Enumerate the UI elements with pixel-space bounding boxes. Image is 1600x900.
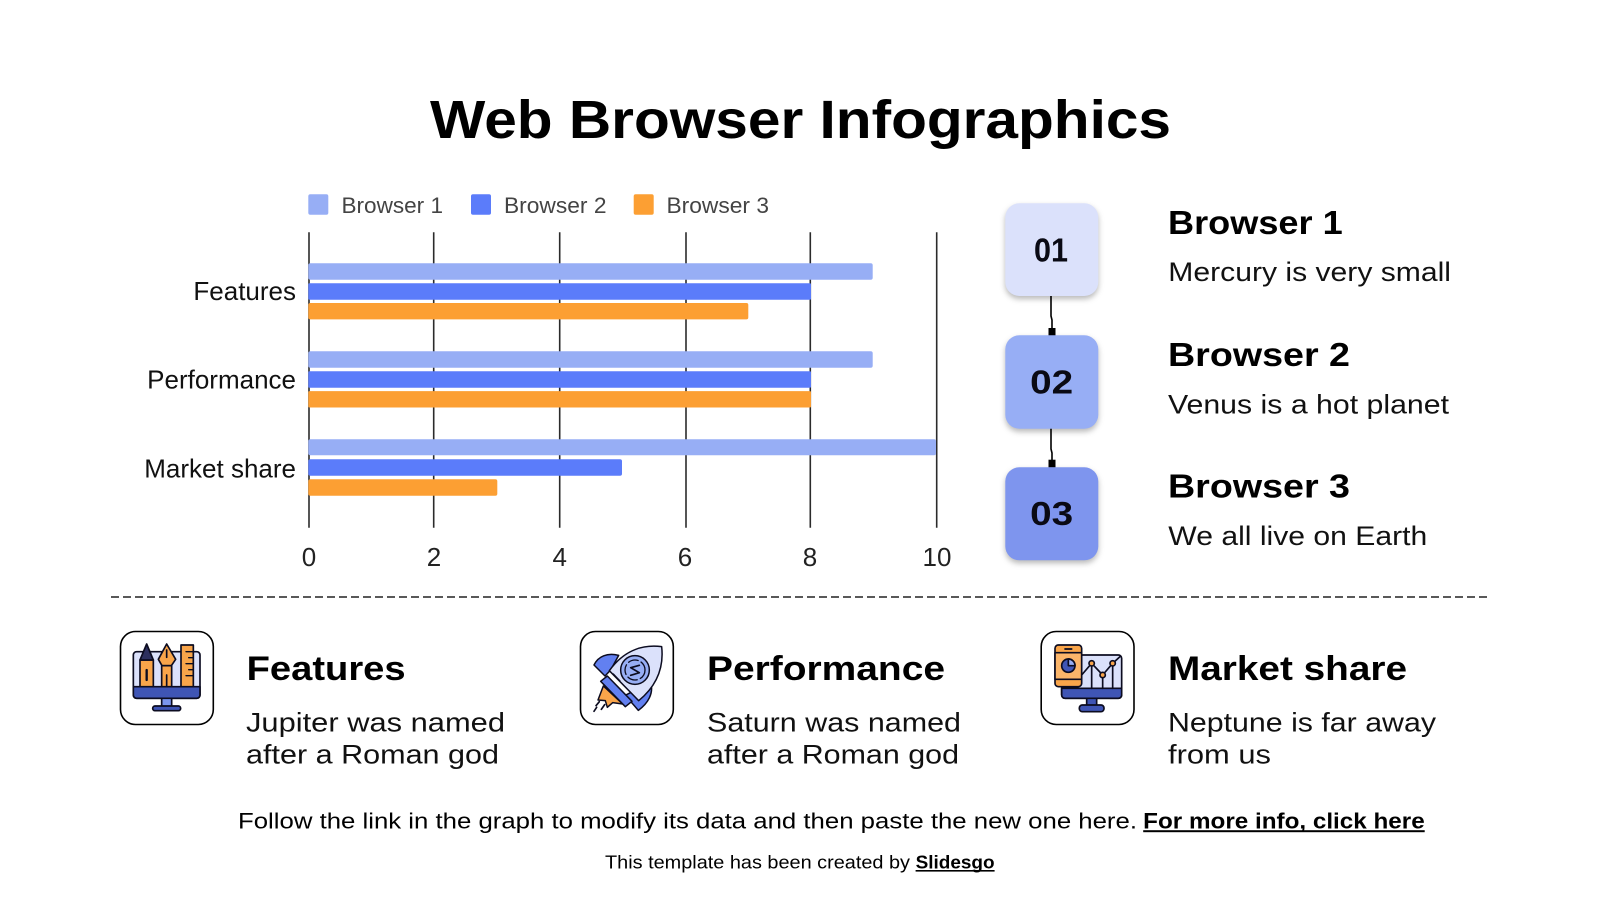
browser descriptions: [1168, 204, 1451, 551]
category labels: Market share: [144, 453, 296, 483]
heading: performance: Performance: [707, 650, 945, 688]
connector 02 to 03: [1048, 428, 1056, 467]
x axis numbers: [302, 542, 951, 572]
text: performance description: Saturn was named: [707, 708, 961, 738]
browser 1 text: Browser 1: [1168, 204, 1343, 241]
x axis numbers: 2: [427, 542, 441, 572]
x axis numbers: 4: [552, 542, 567, 572]
footer note with link: [238, 808, 1425, 833]
icon: rocket: [580, 632, 673, 724]
browser 2 text: Browser 2: [1168, 336, 1350, 373]
text: features description: after a Roman god: [246, 739, 499, 769]
text: market share description: [1168, 708, 1437, 769]
box 03: [1005, 467, 1098, 560]
icon: phone and monitor analytics: [1041, 632, 1134, 724]
heading: market share: Market share: [1168, 650, 1407, 688]
browser 1 text: Mercury is very small: [1168, 257, 1451, 287]
category labels: Features: [193, 276, 296, 306]
browser 3 text: We all live on Earth: [1168, 521, 1427, 551]
bars: Features: [308, 263, 873, 319]
x axis numbers: 6: [678, 542, 692, 572]
box 03: 03: [1030, 495, 1073, 532]
browser 2 text: Venus is a hot planet: [1168, 389, 1450, 419]
text: performance description: after a Roman god: [707, 739, 959, 769]
x axis numbers: 0: [302, 542, 316, 572]
credit line: This template has been created by: [605, 852, 910, 872]
box 02: [1005, 335, 1098, 429]
icon: monitor with design tools: [120, 632, 213, 724]
category labels: Performance: [147, 364, 296, 394]
bar chart: [144, 193, 951, 572]
x axis numbers: 10: [923, 542, 951, 572]
panel: performance: [580, 632, 961, 769]
text: market share description: Neptune is far away: [1168, 708, 1437, 738]
heading: features: Features: [247, 650, 406, 688]
box 02: 02: [1030, 363, 1073, 400]
browser 3 text: Browser 3: [1168, 468, 1350, 505]
text: features description: Jupiter was named: [246, 708, 505, 738]
chart legend: Browser 3: [666, 193, 769, 218]
footer note with link: Follow the link in the graph to modify its data and then paste the new one here.: [238, 808, 1137, 833]
browser 3 text: [1168, 468, 1427, 551]
connector 01 to 02: [1048, 296, 1056, 336]
footer note with link: For more info, click here: [1143, 808, 1425, 833]
chart legend: [308, 193, 769, 218]
chart legend: Browser 1: [342, 193, 443, 218]
numbered browser steps: [1005, 203, 1098, 560]
text: features description: [246, 708, 505, 769]
credit line: Slidesgo: [916, 852, 995, 872]
bars: Market share: [308, 439, 936, 496]
box 01: 01: [1034, 232, 1068, 269]
x axis numbers: 8: [803, 542, 817, 572]
title: Web Browser Infographics: [430, 90, 1171, 150]
text: market share description: from us: [1168, 739, 1271, 769]
browser 1 text: [1168, 204, 1451, 287]
text: performance description: [707, 708, 961, 769]
chart legend: Browser 2: [504, 193, 606, 218]
browser 2 text: [1168, 336, 1450, 419]
bars: Performance: [308, 351, 873, 408]
panel: market share: [1041, 632, 1437, 769]
category labels: [144, 276, 296, 483]
panel: features: [120, 632, 505, 769]
box 01: [1005, 203, 1098, 296]
